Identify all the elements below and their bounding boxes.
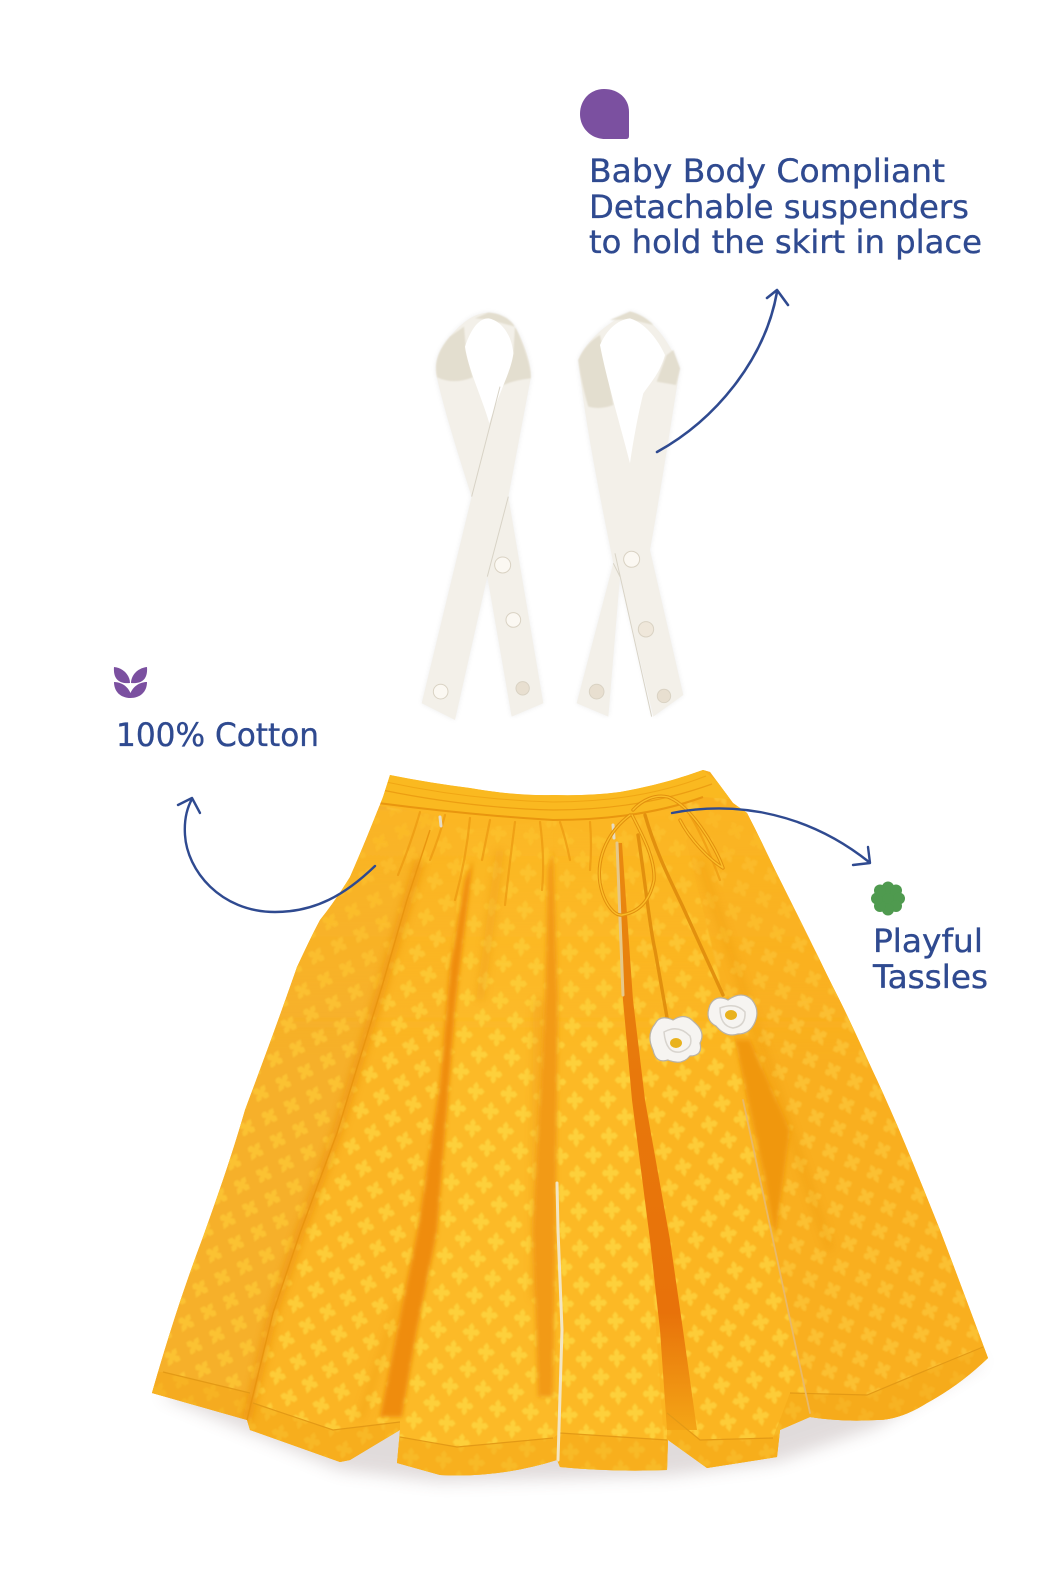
- icon: purple drop: [580, 89, 629, 139]
- icon: purple leaves: [114, 667, 147, 698]
- buttons: [433, 557, 529, 699]
- waist gathers: [398, 812, 720, 905]
- arrow: tassels: [672, 809, 870, 865]
- hem band tone: [152, 1348, 988, 1476]
- callout text: tassels: Playful: [873, 922, 983, 960]
- crease line: [247, 830, 430, 1420]
- fabric motif pattern: [152, 777, 986, 1476]
- skirt: [152, 770, 988, 1476]
- hem stitching: [163, 1347, 983, 1447]
- callout text: suspenders: [589, 152, 982, 261]
- callout text: tassels: Tassles: [872, 958, 988, 996]
- tassel ties: [599, 796, 723, 1023]
- flower left: [650, 1016, 702, 1062]
- trim seams: [440, 817, 810, 1460]
- callout text: suspenders: Baby Body Compliant: [589, 152, 945, 190]
- flower right: [708, 995, 757, 1035]
- callout text: suspenders: to hold the skirt in place: [589, 223, 982, 261]
- callout text: cotton: 100% Cotton: [116, 716, 319, 754]
- suspenders: [422, 312, 683, 720]
- tassel flowers: [650, 995, 757, 1062]
- left suspender strap: [422, 313, 543, 720]
- deep folds: [380, 843, 790, 1430]
- buttons: [589, 551, 671, 703]
- skirt panels with pattern: [152, 770, 988, 1476]
- callout text: tassels: [872, 922, 988, 996]
- skirt shadow: [160, 1350, 985, 1482]
- arrow: cotton: [178, 798, 375, 912]
- icon: green clover: [871, 882, 905, 916]
- waistband: [370, 770, 740, 820]
- soft fold shading: [247, 850, 830, 1420]
- callout text: suspenders: Detachable suspenders: [589, 188, 969, 226]
- right suspender strap: [577, 312, 683, 717]
- arrow: suspenders: [657, 290, 788, 452]
